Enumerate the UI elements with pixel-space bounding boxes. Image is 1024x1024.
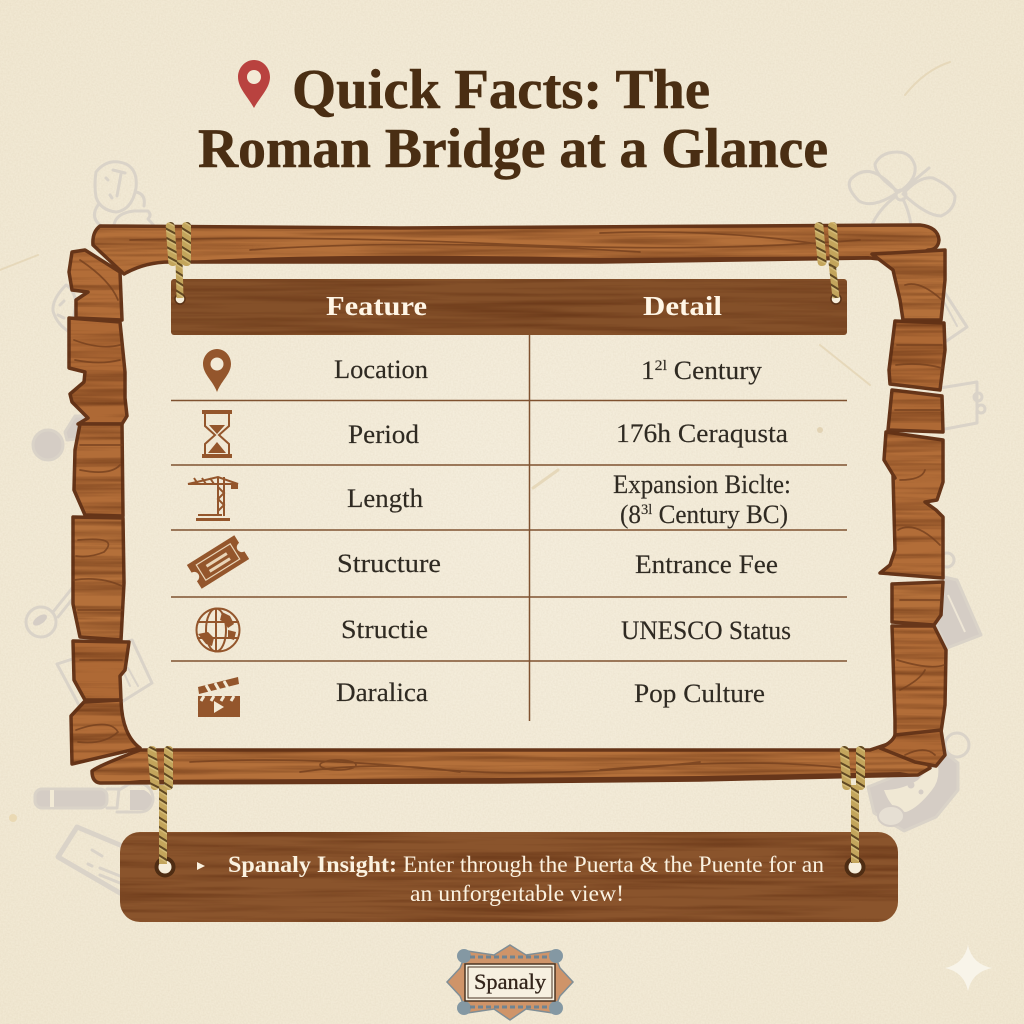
row: structure: Structure (337, 549, 441, 578)
ropes (147, 222, 865, 864)
icon: hourglass (202, 410, 232, 458)
doodle: charger box right (943, 290, 967, 342)
doodle: plug right (940, 382, 985, 429)
table grid lines (171, 335, 847, 721)
insight plank (120, 832, 898, 922)
icon: ticket (187, 535, 249, 589)
icon: globe (196, 608, 240, 652)
row: daralica: Pop Culture (634, 679, 765, 708)
rope: bottom left (147, 746, 173, 864)
arrow marker (197, 862, 205, 870)
row: structure (187, 535, 778, 589)
icon: location pin (203, 349, 231, 392)
row: period (202, 410, 788, 458)
table (171, 279, 847, 721)
row: length: Length (347, 484, 423, 513)
row: period: Period (348, 420, 419, 449)
eyelet right (846, 858, 864, 876)
row: length: 3l (641, 502, 652, 518)
frame: beam shadows and grain (74, 232, 944, 784)
row: period: 176h Ceraqusta (616, 419, 788, 448)
row: structure: Entrance Fee (635, 550, 778, 579)
frame: planks (69, 225, 946, 783)
insight text (228, 852, 825, 906)
row: length: Century BC) (652, 500, 788, 529)
table header plank: Detail (643, 291, 723, 321)
row: length: Expansion Biclte: (613, 470, 791, 499)
doodle: flower top right (849, 152, 955, 225)
insight text: Enter through the Puerta & the Puente for an (403, 852, 825, 877)
wooden frame (69, 225, 946, 784)
doodle: tag right (935, 553, 981, 648)
logo: Spanaly badge: Spanaly (474, 969, 546, 994)
table header plank: Feature (326, 291, 427, 321)
title: Roman Bridge at a Glance (198, 118, 828, 180)
background stains and scratches (0, 62, 950, 822)
doodle: stone faces top left (94, 162, 156, 229)
doodle: spoon left (26, 587, 74, 637)
icon: red location pin (238, 60, 270, 108)
doodle: teapot bottom right (868, 733, 969, 831)
icon: crane (188, 477, 238, 521)
icon: film clapper (198, 677, 240, 717)
row: location: 1 (641, 356, 654, 385)
title (198, 59, 828, 180)
row: length (188, 470, 791, 529)
row: structie (196, 608, 791, 652)
doodle: stone face left (53, 285, 76, 333)
doodle: glasses left (33, 416, 87, 460)
row: daralica (198, 677, 765, 717)
row: structie: UNESCO Status (621, 616, 791, 645)
plank background (120, 832, 898, 922)
doodle: tube bottom left (35, 784, 153, 812)
rope: top left (165, 222, 191, 298)
doodle: phone bottom left (58, 827, 120, 893)
table header plank (171, 279, 847, 335)
row: location: Century (667, 356, 762, 385)
row: location: Location (334, 355, 428, 384)
row: daralica: Daralica (336, 678, 428, 707)
logo: Spanaly badge (447, 945, 573, 1020)
row: location (203, 349, 762, 392)
row: location: 2l (655, 358, 667, 374)
row: length: (8 (620, 500, 642, 529)
title: Quick Facts: The (292, 59, 710, 121)
insight text: an unforgeıtable view! (410, 881, 624, 906)
row: structie: Structie (341, 615, 428, 644)
insight text: Spanaly Insight: (228, 852, 397, 877)
background doodles (26, 152, 985, 893)
rope: bottom right (839, 746, 865, 863)
eyelet left (156, 858, 174, 876)
doodle: notebook left (57, 640, 152, 707)
sparkle bottom right (945, 945, 992, 991)
rope: top right (814, 222, 839, 298)
